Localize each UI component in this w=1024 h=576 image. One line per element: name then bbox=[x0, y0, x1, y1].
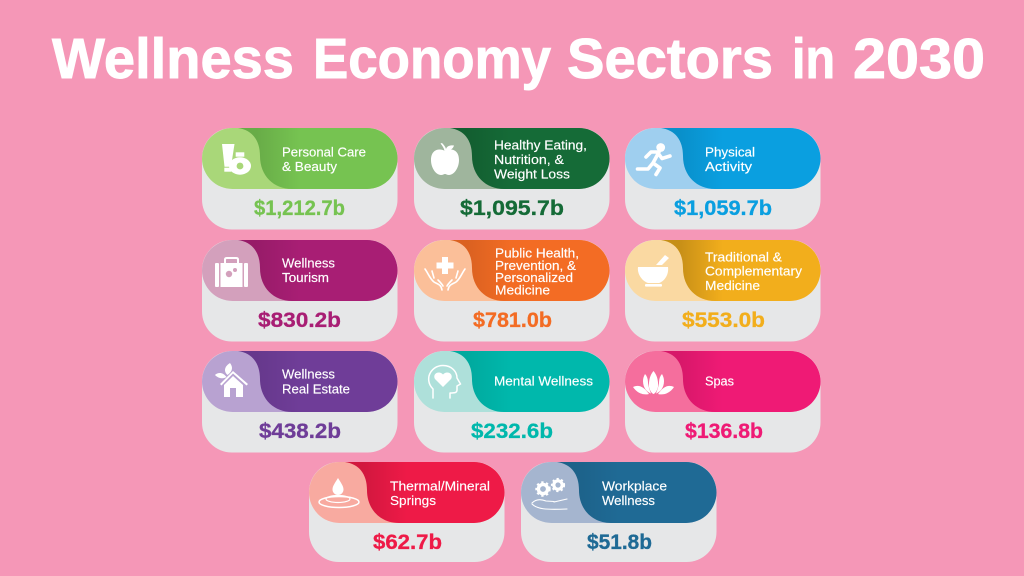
label: Traditional & bbox=[705, 250, 783, 264]
value: $1,059.7b bbox=[674, 197, 772, 220]
label: Medicine bbox=[495, 284, 550, 298]
label: & Beauty bbox=[282, 160, 338, 174]
label bbox=[705, 146, 755, 174]
value: $1,212.7b bbox=[254, 197, 345, 220]
label: Thermal/Mineral bbox=[390, 480, 490, 494]
label: Activity bbox=[705, 160, 753, 174]
label: Physical bbox=[705, 146, 755, 160]
value: $62.7b bbox=[373, 531, 442, 554]
value: $51.8b bbox=[587, 531, 652, 554]
label bbox=[602, 480, 667, 508]
label bbox=[282, 146, 366, 174]
label bbox=[282, 368, 350, 396]
icon: cosmetics bbox=[222, 144, 251, 175]
label: Weight Loss bbox=[494, 168, 570, 182]
label bbox=[705, 250, 803, 293]
panel: mental wellness bbox=[414, 351, 610, 452]
value: $1,095.7b bbox=[460, 197, 564, 220]
label: Springs bbox=[390, 494, 436, 508]
label: Wellness bbox=[602, 494, 655, 508]
panel: spas bbox=[625, 351, 820, 452]
label bbox=[494, 138, 587, 182]
panel: wellness real estate bbox=[202, 351, 398, 452]
panel: thermal and mineral springs bbox=[309, 462, 504, 562]
label: Prevention, & bbox=[495, 259, 577, 273]
panel: wellness tourism bbox=[202, 240, 398, 342]
title: Wellness bbox=[52, 27, 294, 91]
icon: house with leaves bbox=[215, 363, 248, 397]
title: Economy bbox=[313, 27, 551, 91]
icon: mortar and pestle bbox=[638, 255, 669, 287]
label: Tourism bbox=[282, 271, 329, 285]
label: Wellness bbox=[282, 256, 335, 270]
icon: runner bbox=[638, 143, 670, 174]
panel: physical activity bbox=[625, 128, 820, 230]
icon: hands with cross bbox=[425, 257, 465, 290]
value: $136.8b bbox=[685, 420, 763, 443]
label: Workplace bbox=[602, 480, 667, 494]
title: 2030 bbox=[853, 27, 985, 91]
icon: lotus bbox=[633, 371, 674, 394]
label: Healthy Eating, bbox=[494, 138, 587, 152]
label: Spas bbox=[705, 374, 734, 388]
label: Mental Wellness bbox=[494, 374, 593, 388]
value: $232.6b bbox=[471, 420, 553, 443]
icon: suitcase bbox=[215, 258, 248, 287]
panel: workplace wellness bbox=[521, 462, 716, 562]
label bbox=[390, 480, 490, 508]
label: Public Health, bbox=[495, 246, 579, 260]
title: in bbox=[792, 27, 835, 91]
label: Real Estate bbox=[282, 382, 350, 396]
value: $830.2b bbox=[258, 309, 341, 332]
value: $438.2b bbox=[259, 420, 341, 443]
icon: water drop with ripples bbox=[319, 478, 359, 508]
panel: traditional and complementary medicine bbox=[625, 240, 820, 342]
label: Complementary bbox=[705, 264, 803, 278]
label bbox=[495, 246, 579, 298]
value: $781.0b bbox=[473, 309, 552, 332]
icon: apple bbox=[431, 143, 459, 175]
label: Medicine bbox=[705, 279, 760, 293]
title bbox=[52, 27, 985, 91]
title: Sectors bbox=[567, 27, 773, 91]
icon: head with heart bbox=[429, 366, 460, 398]
value: $553.0b bbox=[682, 309, 765, 332]
label: Nutrition, & bbox=[494, 153, 565, 167]
icon: gears over hand bbox=[532, 479, 567, 509]
label: Personal Care bbox=[282, 146, 366, 160]
panel: personal care and beauty bbox=[202, 128, 398, 230]
panel: public health, prevention and personalized medicine bbox=[414, 240, 610, 342]
label: Wellness bbox=[282, 368, 335, 382]
label bbox=[282, 256, 335, 285]
panel: healthy eating, nutrition and weight loss bbox=[414, 128, 610, 230]
label: Personalized bbox=[495, 271, 573, 285]
